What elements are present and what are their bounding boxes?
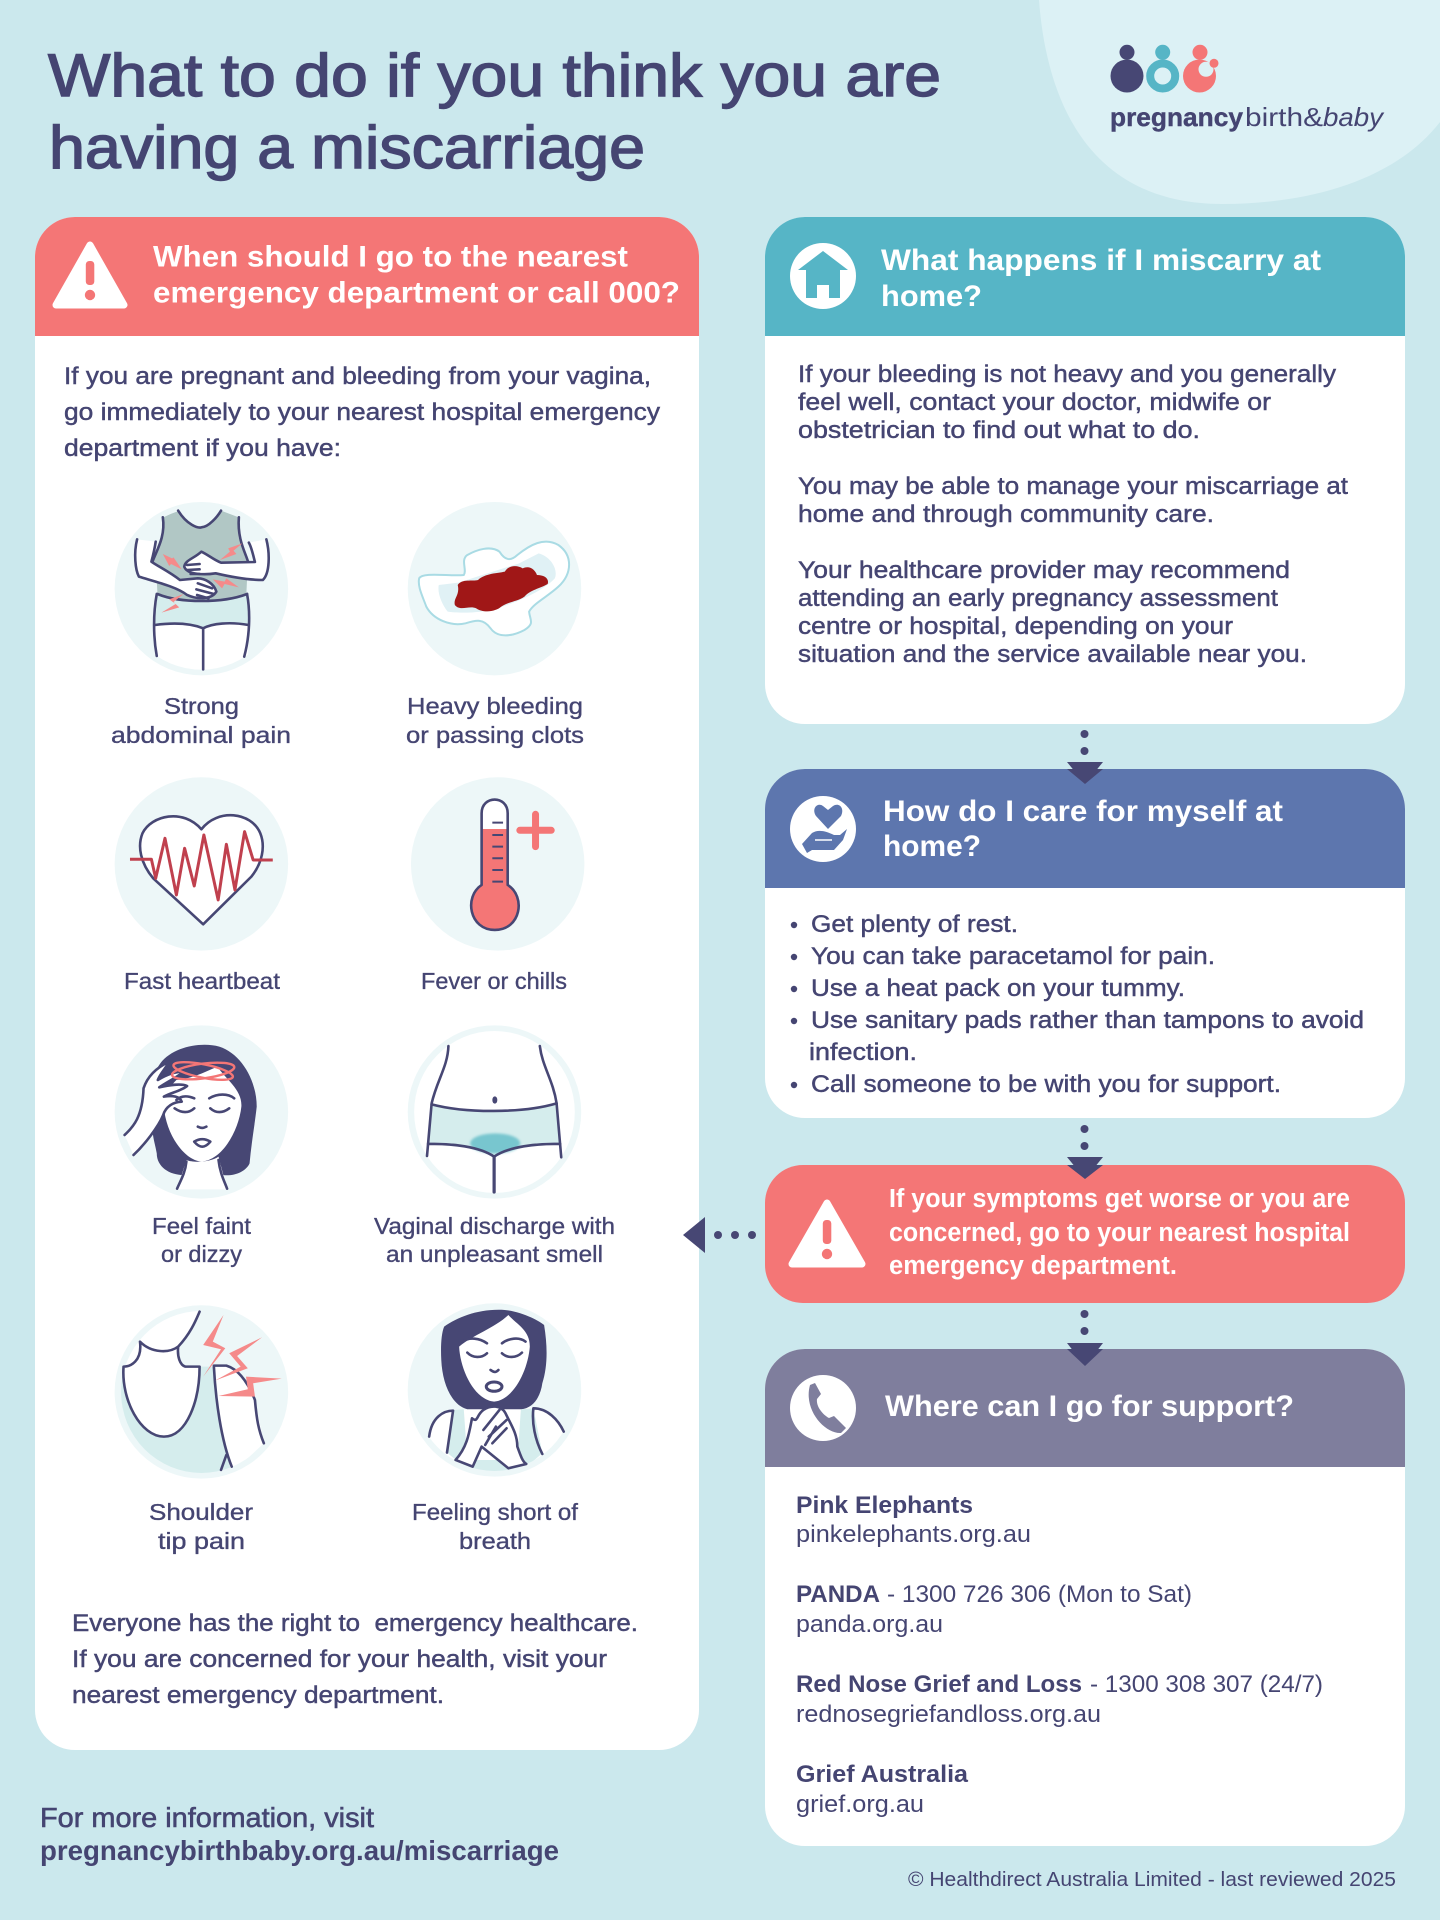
panel: symptoms alert: [765, 1165, 1405, 1303]
support: panda: PANDA: [796, 1581, 880, 1608]
label: heavy bleeding: or passing clots: [406, 722, 584, 748]
care bullet list: Use a heat pack on your tummy.: [811, 975, 1185, 1002]
home text: obstetrician to find out what to do.: [798, 417, 1200, 444]
care heading: home?: [883, 830, 981, 863]
alert text: emergency department.: [889, 1252, 1177, 1280]
emergency intro text: [64, 363, 660, 462]
icon: alert triangle: [792, 1203, 862, 1264]
logo wordmark: pregnancy: [1110, 102, 1244, 132]
support: red nose: [796, 1671, 1323, 1728]
label: fever or chills: Fever or chills: [421, 968, 567, 994]
emergency intro text: go immediately to your nearest hospital emergency: [64, 399, 660, 426]
home heading: What happens if I miscarry at: [881, 244, 1321, 277]
label: shoulder tip pain: [149, 1499, 253, 1554]
care bullet list: Call someone to be with you for support.: [811, 1071, 1281, 1098]
label: strong abdominal pain: Strong: [164, 693, 239, 719]
support header band: [765, 1349, 1405, 1467]
label: shoulder tip pain: tip pain: [158, 1528, 245, 1554]
support: grief australia: Grief Australia: [796, 1761, 969, 1788]
icon: feel faint or dizzy: [115, 1025, 288, 1199]
copyright: © Healthdirect Australia Limited - last reviewed 2025: [908, 1869, 1396, 1891]
home text: home and through community care.: [798, 501, 1214, 528]
label: feeling short of breath: Feeling short of: [412, 1499, 578, 1525]
label: heavy bleeding: Heavy bleeding: [407, 693, 583, 719]
footer: more information: [40, 1802, 559, 1866]
logo background blob: [1039, 0, 1440, 204]
title: [48, 42, 941, 181]
care bullet list: [791, 911, 1364, 1098]
title: What to do if you think you are: [48, 42, 941, 109]
home text: You may be able to manage your miscarriage at: [798, 473, 1348, 500]
label: heavy bleeding: [406, 693, 584, 748]
footer: more information: pregnancybirthbaby.org.au/miscarriage: [40, 1835, 559, 1866]
emergency intro text: department if you have:: [64, 435, 341, 462]
emergency closing text: Everyone has the right to emergency healthcare.: [72, 1610, 638, 1637]
support: pink elephants: [796, 1492, 1031, 1548]
icon: house: [790, 243, 856, 309]
support: red nose: - 1300 308 307 (24/7): [1090, 1671, 1323, 1698]
support: panda: [796, 1581, 1192, 1638]
logo figures: [1110, 45, 1218, 92]
arrow: alert to emergency panel: [683, 1217, 756, 1253]
home heading: home?: [881, 280, 982, 313]
home text: attending an early pregnancy assessment: [798, 585, 1278, 612]
title: having a miscarriage: [49, 114, 645, 181]
logo wordmark: baby: [1323, 102, 1385, 132]
panel: miscarry at home: [765, 217, 1405, 724]
label: vaginal discharge: [374, 1213, 615, 1267]
panel: support: [765, 1349, 1405, 1846]
label: strong abdominal pain: [111, 693, 291, 748]
support: grief australia: [796, 1761, 969, 1818]
support heading: Where can I go for support?: [885, 1390, 1294, 1423]
support: grief australia: grief.org.au: [796, 1791, 924, 1818]
label: feeling short of breath: breath: [459, 1528, 531, 1554]
icon: vaginal discharge: [408, 1025, 581, 1199]
emergency heading: [153, 240, 680, 310]
home text: feel well, contact your doctor, midwife or: [798, 389, 1271, 416]
care heading: How do I care for myself at: [883, 795, 1283, 828]
care bullet list: You can take paracetamol for pain.: [811, 943, 1215, 970]
home text: Your healthcare provider may recommend: [798, 557, 1290, 584]
alert text: If your symptoms get worse or you are: [889, 1185, 1350, 1213]
label: fast heartbeat: Fast heartbeat: [124, 968, 280, 994]
icon: heart in hand: [790, 796, 856, 862]
label: feel faint or dizzy: [152, 1213, 251, 1267]
panel: emergency: [35, 217, 699, 1750]
support: red nose: rednosegriefandloss.org.au: [796, 1701, 1101, 1728]
emergency closing text: If you are concerned for your health, visit your: [72, 1646, 607, 1673]
logo: pregnancy birth and baby: [1110, 45, 1385, 132]
home heading: [881, 244, 1321, 313]
emergency closing text: [72, 1610, 638, 1709]
icon: shoulder tip pain: [115, 1305, 288, 1479]
label: shoulder tip pain: Shoulder: [149, 1499, 253, 1525]
label: vaginal discharge: Vaginal discharge with: [374, 1213, 615, 1239]
icon: strong abdominal pain: [115, 502, 288, 680]
arrow tip on alert: [1067, 1165, 1103, 1179]
alert text: [889, 1185, 1350, 1280]
label: feel faint or dizzy: or dizzy: [161, 1241, 242, 1267]
label: feel faint or dizzy: Feel faint: [152, 1213, 251, 1239]
support: panda: panda.org.au: [796, 1611, 943, 1638]
arrow: home to care: [1067, 730, 1103, 784]
home text: centre or hospital, depending on your: [798, 613, 1233, 640]
emergency heading: emergency department or call 000?: [153, 276, 680, 310]
home header band: [765, 217, 1405, 336]
home text: [798, 361, 1348, 668]
emergency header band: [35, 217, 699, 336]
footer: more information: For more information, visit: [40, 1802, 374, 1833]
icon: feeling short of breath: [408, 1303, 581, 1477]
arrow: care to alert: [1067, 1125, 1103, 1179]
arrow tip overlay: [1067, 769, 1103, 784]
icon: warning triangle: [56, 245, 124, 305]
home text: situation and the service available near you.: [798, 641, 1307, 668]
care bullet list: Use sanitary pads rather than tampons to avoid: [811, 1007, 1364, 1034]
label: feeling short of breath: [412, 1499, 578, 1554]
icon: fever thermometer: [411, 777, 584, 951]
support: pink elephants: Pink Elephants: [796, 1492, 973, 1519]
emergency heading: When should I go to the nearest: [153, 240, 628, 274]
support: pink elephants: pinkelephants.org.au: [796, 1521, 1031, 1548]
home text: If your bleeding is not heavy and you generally: [798, 361, 1336, 388]
label: vaginal discharge: an unpleasant smell: [386, 1241, 603, 1267]
icon: fast heartbeat: [115, 777, 288, 951]
emergency intro text: If you are pregnant and bleeding from your vagina,: [64, 363, 651, 390]
emergency closing text: nearest emergency department.: [72, 1682, 444, 1709]
care bullet list: Get plenty of rest.: [811, 911, 1018, 938]
care bullet list: infection.: [809, 1039, 917, 1066]
support: red nose: Red Nose Grief and Loss: [796, 1671, 1082, 1698]
arrow tip on support: [1067, 1349, 1103, 1366]
logo wordmark: birth&: [1245, 102, 1323, 132]
alert text: concerned, go to your nearest hospital: [889, 1219, 1350, 1247]
care header band: [765, 769, 1405, 888]
arrow: alert to support: [1067, 1310, 1103, 1366]
panel: care for myself: [765, 769, 1405, 1118]
label: strong abdominal pain: abdominal pain: [111, 722, 291, 748]
icon: heavy bleeding pad: [408, 502, 581, 675]
logo wordmark: [1110, 102, 1385, 132]
care heading: [883, 795, 1283, 863]
support: panda: - 1300 726 306 (Mon to Sat): [887, 1581, 1192, 1608]
icon: phone: [790, 1375, 856, 1441]
